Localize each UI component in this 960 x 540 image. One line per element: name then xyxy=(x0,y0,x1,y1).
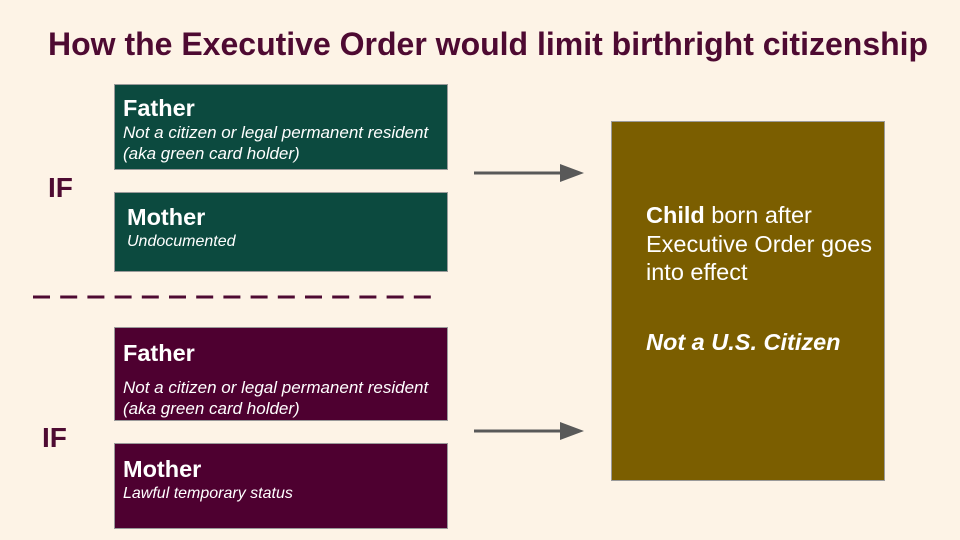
title: How the Executive Order would limit birthright citizenship xyxy=(48,26,928,62)
panel: mother 1: Undocumented xyxy=(127,233,236,250)
panel: child outcome xyxy=(611,121,885,481)
arrow 1 xyxy=(474,164,584,182)
panel: father 1 xyxy=(114,84,448,170)
panel: mother 1: Mother xyxy=(127,204,205,230)
panel: father 2: Father xyxy=(123,340,195,366)
panel: child outcome: Executive Order goes xyxy=(646,230,872,256)
panel: father 2: (aka green card holder) xyxy=(123,399,300,418)
panel: mother 1 xyxy=(114,192,448,272)
dashed divider xyxy=(33,296,431,298)
panel: father 1: Father xyxy=(123,95,195,121)
arrow 2 xyxy=(474,422,584,440)
panel: mother 2: Mother xyxy=(123,456,201,482)
label: IF 1: IF xyxy=(48,172,73,203)
panel: child outcome: Not a U.S. Citizen xyxy=(646,328,841,354)
panel: child outcome: into effect xyxy=(646,259,747,285)
panel: mother 2 xyxy=(114,443,448,529)
panel: father 2 xyxy=(114,327,448,421)
panel: mother 2: Lawful temporary status xyxy=(123,485,293,502)
label: IF 2: IF xyxy=(42,422,67,453)
panel: child outcome: Child born after xyxy=(646,202,812,228)
panel: father 1: Not a citizen or legal permanent resident xyxy=(123,123,428,142)
panel: father 1: (aka green card holder) xyxy=(123,144,300,163)
panel: father 2: Not a citizen or legal permanent resident xyxy=(123,378,428,397)
